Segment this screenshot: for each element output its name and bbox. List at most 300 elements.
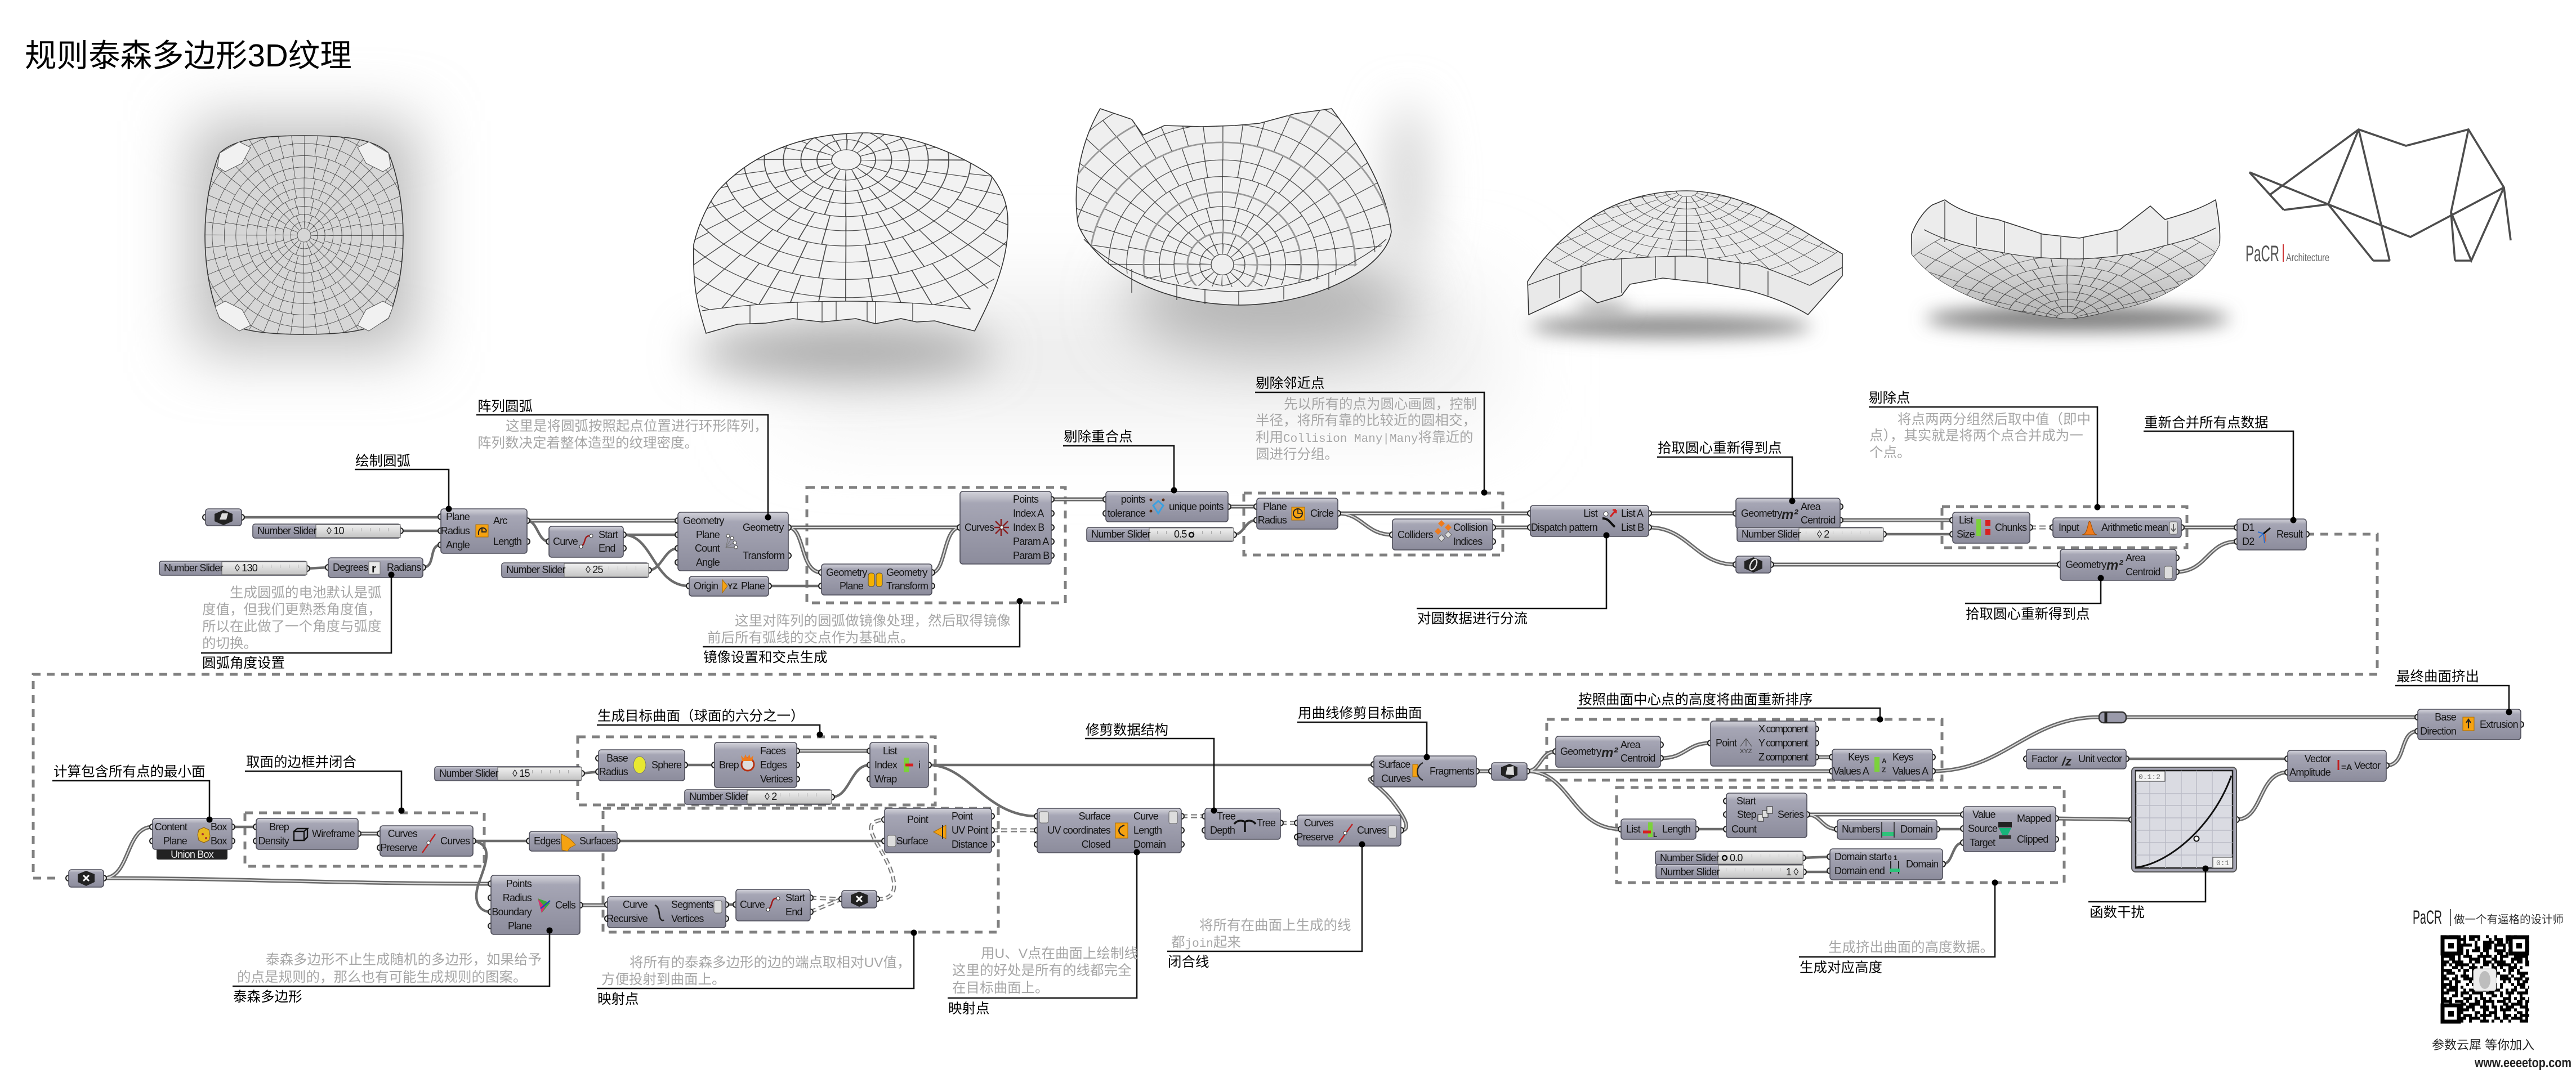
- slider: 2 sphere face: ◊ 2: [765, 791, 777, 802]
- component: Radians: r: [372, 563, 376, 575]
- note: 圆弧角度: 度值，但我们更熟悉角度值，: [202, 602, 382, 617]
- soft background shadows: [191, 101, 2230, 417]
- note: 圆弧角度: 的切换。: [202, 636, 257, 651]
- note: 泰森多边形: 泰森多边形不止生成随机的多边形，如果给予: [266, 952, 542, 968]
- label: 泰森多边形: 泰森多边形: [233, 989, 302, 1005]
- component: YZ Plane: Origin: [694, 580, 718, 592]
- component: Deconstruct Brep: Faces: [760, 745, 786, 757]
- component: Cull Duplicates: [1103, 491, 1231, 522]
- component: YZ Plane: [686, 576, 771, 596]
- slider: 0.5: 0.5: [1174, 529, 1187, 540]
- component: Circle: Plane: [1263, 501, 1287, 512]
- label: 剔除重合点: [1063, 429, 1177, 493]
- component: Box Union: [150, 818, 235, 860]
- component: Multiple Curves intersection: [957, 491, 1054, 564]
- note: 镜像: 前后所有弧线的交点作为基础点。: [707, 630, 914, 646]
- label: 函数干扰: [2088, 866, 2208, 920]
- component: Wireframe: [253, 818, 361, 849]
- brand line: PaCR: 做一个有逼格的设计师: [2454, 914, 2564, 926]
- component: Surface Split: Surface: [1378, 759, 1410, 770]
- label: 映射点 second: [948, 849, 1140, 1017]
- component: Cull Duplicates: points: [1121, 494, 1146, 505]
- note: 镜像: [707, 613, 1011, 646]
- component: Polar Array: Count: [695, 543, 720, 554]
- component: Merge: D1: [2242, 522, 2254, 533]
- label: 镜像设置和交点生成: 镜像设置和交点生成: [703, 650, 828, 665]
- component: Wireframe: Brep: [269, 821, 289, 833]
- slider: 10: Number Slider: [257, 525, 316, 536]
- label: 函数干扰: 函数干扰: [2090, 905, 2145, 920]
- note: 映射点 first: [601, 955, 911, 987]
- component: Partition List: List: [1959, 514, 1974, 526]
- component: Box Union: Content: [155, 821, 187, 833]
- component: Iso / Curve on surface: Domain: [1133, 839, 1166, 850]
- param: curve: [1733, 556, 1774, 573]
- component: List Item: i: [918, 759, 920, 771]
- label: 泰森多边形: [233, 928, 553, 1005]
- note: 闭合线: 将所有在曲面上生成的线: [1199, 918, 1351, 933]
- label: 圆弧角度设置: [201, 572, 394, 671]
- component: List Item: Wrap: [874, 773, 897, 785]
- component: Curve Closest Point: Point: [952, 811, 973, 822]
- label: 拾取圆心重新得到点 top: 拾取圆心重新得到点: [1658, 440, 1782, 456]
- label: 闭合线: 闭合线: [1168, 954, 1209, 970]
- component: Mirror: Plane: [840, 580, 864, 592]
- title: 规则泰森多边形3D纹理: [25, 38, 352, 73]
- component: End Points 2: Start: [785, 892, 805, 903]
- component: Multiple Curves intersection: Index B: [1013, 522, 1044, 533]
- component: Simplify Tree: Tree: [1217, 811, 1236, 822]
- component: Deconstruct Brep: Vertices: [760, 773, 793, 785]
- component: End Points: End: [599, 543, 615, 554]
- label: 取面的边框并闭合: [245, 754, 404, 814]
- component: Join Curves 1: Curves: [440, 835, 470, 847]
- component: Area top: Centroid: [1801, 514, 1836, 526]
- component: Explode: Vertices: [671, 913, 704, 924]
- component: Iso / Curve on surface: Surface: [1079, 811, 1111, 822]
- component: YZ Plane: Plane: [741, 580, 765, 592]
- component: Graph Mapper: [2129, 767, 2239, 872]
- component: Simplify Tree: Tree: [1257, 817, 1276, 829]
- label: 修剪数据结构: [1085, 722, 1217, 814]
- component: Curve Closest Point: [882, 808, 994, 853]
- component: Area top: [1733, 498, 1843, 529]
- component: Series: Count: [1731, 824, 1757, 835]
- component: Mirror: Geometry: [826, 567, 867, 578]
- label: 闭合线: [1167, 841, 1365, 970]
- component: Bounds: Domain: [1900, 824, 1932, 835]
- component: Construct Domain: 0 1: [1888, 854, 1898, 862]
- label: 拾取圆心重新得到点 bottom: 拾取圆心重新得到点: [1966, 606, 2090, 622]
- slider: 25: Number Slider: [506, 564, 565, 575]
- component: Curve Closest Point: Point: [907, 814, 928, 825]
- note: 镜像: 这里对阵列的圆弧做镜像处理，然后取得镜像: [735, 613, 1011, 629]
- component: Area bottom: [2057, 549, 2179, 580]
- component: Join Curves 2: Curves: [1304, 817, 1334, 829]
- component: List Length: [1618, 819, 1699, 839]
- component: Remap Numbers: Clipped: [2017, 834, 2048, 845]
- label: 生成对应高度: 生成对应高度: [1800, 960, 1882, 975]
- component: Mirror: Transform: [886, 580, 928, 592]
- component: Amplitude: =A: [2341, 763, 2352, 772]
- param: relay x: [66, 870, 106, 887]
- label: 计算包含所有点的最小面: [52, 764, 213, 823]
- component: Sphere: Radius: [599, 766, 628, 777]
- component: Polar Array: Plane: [696, 529, 720, 540]
- component: Sphere: [596, 750, 687, 781]
- label: 生成目标曲面: 生成目标曲面（球面的六分之一）: [597, 708, 804, 724]
- slider: 0.0: 0.0: [1730, 852, 1743, 863]
- component: Sort List: [1829, 749, 1935, 780]
- component: Extrude: [2415, 709, 2524, 740]
- component: Area sort: [1553, 736, 1663, 767]
- note: 闭合线: [1171, 918, 1351, 951]
- component: Dispatch: List: [1583, 508, 1598, 519]
- component: Deconstruct Point: [1708, 721, 1819, 766]
- component: Amplitude: Amplitude: [2289, 767, 2331, 778]
- component: Amplitude: Vector: [2354, 760, 2381, 771]
- component: Mirror: [819, 564, 935, 595]
- component: Area sort: Centroid: [1620, 753, 1655, 764]
- component: Sort List: Values A: [1892, 766, 1928, 777]
- component: Remap Numbers: Source: [1968, 823, 1998, 834]
- component: Construct Domain: [1827, 849, 1945, 880]
- component: End Points: Start: [599, 529, 618, 540]
- component: Collision: [1390, 519, 1495, 550]
- component: Average: Input: [2059, 522, 2079, 533]
- label: 用曲线修剪目标曲面: 用曲线修剪目标曲面: [1298, 705, 1422, 721]
- tagline: 参数云犀 等你加入: [2432, 1038, 2534, 1052]
- component: Construct Domain: Domain: [1906, 858, 1938, 870]
- component: Area top: Area: [1801, 501, 1821, 512]
- component: List Length: Length: [1662, 824, 1690, 835]
- label: 剔除点: 剔除点: [1869, 390, 1910, 406]
- component: List Length: L: [1653, 831, 1657, 839]
- dashed grouping boxes: [245, 487, 2187, 932]
- component: Multiple Curves intersection: Index A: [1013, 508, 1044, 519]
- component: Iso / Curve on surface: Length: [1133, 825, 1162, 836]
- QR code: [2441, 937, 2529, 1022]
- render: bowl from inside: [1075, 108, 1392, 306]
- note: 剔除点: 点），其实就是将两个点合并成为一: [1869, 428, 2083, 444]
- component: Extrude: Direction: [2420, 726, 2456, 737]
- component: Curve Closest Point: Surface: [896, 835, 928, 847]
- component: Box Union: Box: [211, 821, 227, 833]
- note: 闭合线: 都join起来: [1171, 934, 1241, 951]
- component: Iso / Curve on surface: Curve: [1133, 811, 1159, 822]
- component: Unit Z: Factor: [2032, 753, 2058, 764]
- component: Sort List: A: [1882, 757, 1887, 765]
- component: Edge Surface: Edges: [534, 835, 561, 847]
- component: Bounds: Numbers: [1842, 824, 1880, 835]
- note: 映射点 second: 在目标曲面上。: [952, 980, 1048, 996]
- logo: origami rhino: [2249, 129, 2511, 261]
- label: 用曲线修剪目标曲面: [1297, 705, 1430, 760]
- component: End Points: Curve: [553, 536, 578, 547]
- note: 阵列圆弧: 这里是将圆弧按照起点位置进行环形阵列，: [506, 418, 768, 434]
- component: Deconstruct Point: Y component: [1758, 737, 1809, 749]
- component: Deconstruct Brep: [712, 742, 800, 787]
- note: 泰森多边形: 的点是规则的，那么也有可能生成规则的图案。: [237, 969, 527, 985]
- label: 重新合并所有点数据: 重新合并所有点数据: [2144, 415, 2268, 431]
- component: Radians: Radians: [387, 562, 421, 573]
- component: Join Curves 1: [377, 826, 476, 856]
- note: 映射点 second: 这里的好处是所有的线都完全: [952, 963, 1132, 978]
- component: Partition List: Chunks: [1995, 522, 2027, 533]
- note: 生成对应高度: 生成挤出曲面的高度数据。: [1828, 939, 1994, 955]
- component: Cull Duplicates: unique points: [1169, 501, 1224, 512]
- component: Area sort: Area: [1620, 739, 1641, 750]
- slider: 0.0: Number Slider: [1660, 852, 1719, 863]
- slider: 15: [435, 767, 584, 781]
- component: Voronoi: Points: [506, 878, 532, 889]
- component: Arc: Plane: [446, 511, 470, 522]
- note: 剔除点: 将点两两分组然后取中值（即中: [1898, 411, 2091, 427]
- component: Sphere: Sphere: [651, 759, 682, 771]
- component: Merge: [2234, 519, 2309, 550]
- note: 圆弧角度: 所以在此做了一个角度与弧度: [202, 619, 382, 634]
- component: Join Curves 1: Curves: [388, 828, 418, 839]
- component: Radians: Degrees: [333, 562, 368, 573]
- slider: 25: [502, 563, 651, 578]
- note: 剔除邻近点: [1256, 396, 1477, 462]
- slider: 1: [1656, 865, 1806, 879]
- label: 映射点 second: 映射点: [948, 1001, 990, 1017]
- component: Polar Array: Geometry: [743, 522, 784, 533]
- component: Explode: Segments: [671, 899, 713, 910]
- slider: 15: ◊ 15: [512, 768, 530, 779]
- component: Construct Domain: Domain end: [1834, 865, 1885, 876]
- note: 阵列圆弧: 阵列数决定着整体造型的纹理密度。: [477, 435, 698, 451]
- render: small bowl, side view: [1911, 199, 2221, 319]
- label: 取面的边框并闭合: 取面的边框并闭合: [246, 754, 356, 770]
- component: Merge: D2: [2242, 536, 2254, 547]
- label: 阵列圆弧: 阵列圆弧: [477, 399, 533, 414]
- component: Circle: Radius: [1258, 514, 1287, 526]
- note: 剔除邻近点: 圆进行分组。: [1256, 446, 1338, 462]
- component: Area top: Geometry: [1741, 508, 1782, 519]
- component: Join Curves 2: [1294, 815, 1404, 846]
- component: Polar Array: [675, 512, 791, 571]
- component: Curve Closest Point: Distance: [952, 839, 988, 850]
- component: Merge: Result: [2276, 529, 2303, 540]
- label: 剔除点: [1869, 390, 2100, 510]
- component: Multiple Curves intersection: Param A: [1013, 536, 1049, 547]
- label: 生成目标曲面: [597, 708, 823, 737]
- component: Wireframe: Density: [258, 835, 289, 847]
- label: 计算包含所有点的最小面: 计算包含所有点的最小面: [53, 764, 205, 780]
- render: dome from above: [693, 132, 1008, 334]
- component: Arc: Length: [493, 536, 521, 547]
- component: Voronoi: Plane: [508, 920, 532, 932]
- component: Multiple Curves intersection: Points: [1013, 494, 1039, 505]
- component: Voronoi: Cells: [555, 900, 576, 911]
- component: Deconstruct Point: Point: [1716, 737, 1737, 749]
- component: Area bottom: m²: [2106, 558, 2123, 573]
- slider: 10: ◊ 10: [327, 525, 345, 536]
- component: Dispatch: Dispatch pattern: [1531, 522, 1597, 533]
- component: Partition List: Size: [1957, 529, 1975, 540]
- component: Dispatch: List A: [1621, 508, 1644, 519]
- component: Amplitude: Vector: [2305, 753, 2331, 764]
- note: 剔除邻近点: 利用Collision Many|Many将靠近的: [1256, 429, 1473, 446]
- label: 修剪数据结构: 修剪数据结构: [1086, 722, 1168, 738]
- component: Average: Arithmetic mean: [2101, 522, 2168, 533]
- component: Unit Z: [2024, 749, 2129, 769]
- slider: 2: ◊ 2: [1817, 529, 1829, 540]
- label: 按照曲面中心点的高度将曲面重新排序: 按照曲面中心点的高度将曲面重新排序: [1578, 692, 1813, 708]
- note: 映射点 second: [952, 946, 1138, 996]
- component: Arc: Angle: [446, 539, 470, 551]
- slider: 0.5: [1087, 527, 1236, 542]
- note: 映射点 first: 将所有的泰森多边形的边的端点取相对UV值，: [630, 955, 911, 970]
- param: surface: [1489, 763, 1530, 780]
- slider: 1: 1 ◊: [1786, 866, 1798, 878]
- component: Dispatch: List B: [1621, 522, 1644, 533]
- component: Remap Numbers: Target: [1970, 837, 1995, 848]
- component: Construct Domain: Domain start: [1834, 851, 1887, 862]
- component: Sort List: Keys: [1848, 751, 1869, 763]
- component: Area sort: m²: [1601, 745, 1618, 760]
- label: 绘制圆弧: [355, 453, 452, 512]
- component: Explode: [605, 897, 729, 928]
- component: Multiple Curves intersection: Param B: [1013, 550, 1050, 561]
- label: 阵列圆弧: [476, 399, 771, 520]
- component: List Item: Index: [874, 759, 898, 771]
- slider: 2 sphere face: [685, 790, 834, 804]
- label: 剔除重合点: 剔除重合点: [1064, 429, 1133, 445]
- label: 重新合并所有点数据: [2144, 415, 2296, 523]
- component: Series: Start: [1736, 795, 1756, 807]
- component: Edge Surface: [526, 831, 620, 851]
- slider: 25: ◊ 25: [586, 564, 604, 575]
- component: Join Curves 2: Preserve: [1296, 831, 1334, 843]
- slider: 2: [1737, 527, 1886, 542]
- component: Iso / Curve on surface: Closed: [1082, 839, 1110, 850]
- slider: 0.0: [1655, 851, 1806, 865]
- component: Surface Split: [1371, 756, 1479, 787]
- component: Deconstruct Point: XYZ: [1740, 748, 1752, 755]
- component: Arc: Radius: [441, 525, 470, 536]
- component: Polar Array: Transform: [743, 550, 784, 561]
- component: List Length: List: [1626, 824, 1641, 835]
- slider: 1: Number Slider: [1660, 866, 1720, 878]
- brand line: PaCR: PaCR: [2413, 907, 2442, 928]
- param: plane: [203, 509, 244, 526]
- note: 圆弧角度: 生成圆弧的电池默认是弧: [230, 585, 382, 601]
- component: Surface Split: Curves: [1381, 773, 1411, 784]
- note: 剔除邻近点: 先以所有的点为圆心画圆，控制: [1284, 396, 1477, 412]
- component: Arc: Arc: [493, 515, 507, 526]
- component: Remap Numbers: Value: [1972, 809, 1995, 820]
- component: Simplify Tree: Depth: [1210, 825, 1235, 836]
- component: Sort List: Z: [1882, 766, 1886, 774]
- note: 剔除点: [1869, 411, 2091, 460]
- component: End Points: [546, 526, 626, 557]
- dashed link wire between rows: [33, 534, 2377, 878]
- label: 剔除邻近点: 剔除邻近点: [1256, 375, 1324, 391]
- note: 阵列圆弧: [477, 418, 768, 451]
- component: Box Union: Plane: [163, 835, 187, 847]
- component: Collision: Collision: [1453, 522, 1488, 533]
- component: Wireframe: Wireframe: [312, 828, 355, 839]
- logo text: PaCR Architecture: Architecture: [2286, 252, 2329, 264]
- label: 拾取圆心重新得到点 top: [1657, 440, 1795, 504]
- component: Cull Duplicates: tolerance: [1108, 508, 1146, 519]
- slider: 2 sphere face: Number Slider: [689, 791, 748, 802]
- component: End Points 2: [733, 889, 813, 921]
- component: Surface Split: Fragments: [1430, 766, 1475, 777]
- component: Remap Numbers: [1961, 807, 2059, 852]
- param: relay: [2099, 712, 2126, 723]
- component: Area bottom: Centroid: [2126, 566, 2160, 578]
- component: Mirror: Geometry: [886, 567, 927, 578]
- component: Area bottom: Area: [2126, 552, 2146, 563]
- note: 映射点 second: 用U、V点在曲面上绘制线: [981, 946, 1138, 961]
- component: Graph Mapper: 0.1:2: [2139, 773, 2160, 781]
- label: 圆弧角度设置: 圆弧角度设置: [202, 655, 285, 671]
- note: 剔除邻近点: 半径，将所有靠的比较近的圆相交，: [1256, 413, 1476, 428]
- label: 最终曲面挤出: [2395, 669, 2512, 715]
- note: 剔除点: 个点。: [1869, 445, 1911, 460]
- component: Radians: [325, 558, 426, 578]
- component: YZ Plane: YZ: [727, 581, 738, 590]
- component: Extrude: Extrusion: [2480, 719, 2518, 730]
- component: Area top: m²: [1782, 507, 1798, 522]
- param: relay x 2: [839, 890, 879, 908]
- label: 映射点 first: [597, 930, 917, 1007]
- component: Circle: [1254, 498, 1341, 529]
- component: Amplitude: [2285, 750, 2389, 781]
- slider: 130: ◊ 130: [235, 562, 258, 574]
- component: Join Curves 1: Preserve: [380, 842, 418, 853]
- slider: 0.5: Number Slider: [1091, 529, 1150, 540]
- component: Box Union: Box: [211, 835, 227, 847]
- component: Voronoi: Radius: [503, 892, 532, 903]
- slider: 10: [253, 524, 403, 538]
- component: Deconstruct Brep: Edges: [760, 759, 787, 771]
- component: Multiple Curves intersection: Curves: [965, 522, 994, 533]
- note: 圆弧角度: [202, 585, 382, 651]
- component: Collision: Colliders: [1398, 529, 1434, 540]
- component: Sort List: Values A: [1833, 766, 1869, 777]
- component: Sphere: Base: [606, 753, 628, 764]
- label: 对圆数据进行分流: [1417, 532, 1609, 626]
- component: Deconstruct Point: X component: [1758, 723, 1809, 735]
- component: List Item: List: [883, 745, 898, 757]
- component: Simplify Tree: [1202, 808, 1283, 839]
- component: Polar Array: Angle: [696, 557, 720, 568]
- component: Deconstruct Point: Z component: [1758, 751, 1809, 763]
- label: 生成对应高度: [1799, 879, 1998, 975]
- component: Unit Z: Unit vector: [2078, 753, 2122, 764]
- component: Curve Closest Point: UV Point: [952, 825, 988, 836]
- label: 拾取圆心重新得到点 bottom: [1965, 575, 2104, 622]
- slider: 130: Number Slider: [164, 562, 223, 574]
- component: List Item: [867, 742, 931, 787]
- component: Remap Numbers: Mapped: [2017, 813, 2051, 824]
- label: 绘制圆弧: 绘制圆弧: [355, 453, 410, 469]
- label: 按照曲面中心点的高度将曲面重新排序: [1577, 692, 1883, 723]
- component: Partition List: [1950, 512, 2033, 543]
- component: End Points 2: End: [785, 906, 802, 918]
- component: Explode: Recursive: [606, 913, 648, 924]
- component: End Points 2: Curve: [740, 899, 765, 910]
- slider: 130: [159, 561, 310, 575]
- component: Unit Z: /z: [2061, 754, 2071, 768]
- label: 映射点 first: 映射点: [597, 991, 639, 1007]
- label: 对圆数据进行分流: 对圆数据进行分流: [1417, 611, 1528, 626]
